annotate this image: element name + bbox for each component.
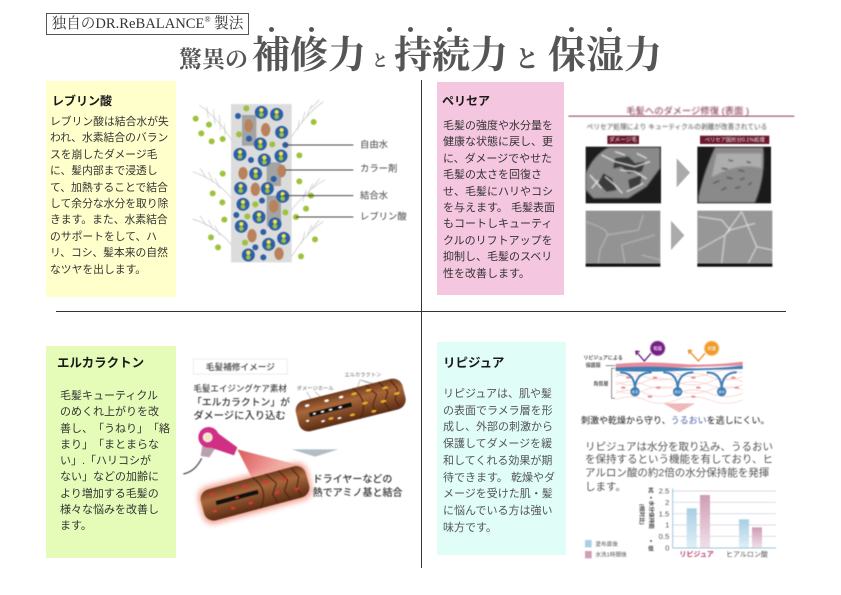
text: lipidure function: します。 bbox=[585, 481, 626, 493]
chart: skin protection diagram: 水分 bbox=[718, 389, 726, 394]
top hair bbox=[294, 376, 408, 434]
text: elkalactone description: より増加する毛髪の bbox=[60, 488, 159, 500]
title bbox=[179, 27, 662, 77]
text: lipidure function: リピジュアは水分を取り込み、うるおい bbox=[585, 441, 773, 453]
chart: moisture retention bar chart: 高 bbox=[648, 487, 654, 495]
chart: hair repair image bbox=[182, 358, 406, 528]
chart: hair repair image: 毛髪エイジングケア素材 bbox=[193, 383, 287, 393]
chart: skin protection diagram: 水分 bbox=[674, 389, 682, 394]
text: lipidure description bbox=[443, 388, 555, 534]
text: lipidure description: 成し、外部の刺激から bbox=[443, 421, 553, 433]
chart: skin protection diagram bbox=[580, 340, 769, 426]
chart: hair repair image: ダメージに入り込む bbox=[193, 409, 286, 422]
chart: skin protection diagram: 刺激や乾燥から守り、うるおいを逃しにくい。 bbox=[581, 415, 769, 426]
text: elkalactone description: い」.「ハリコシが bbox=[60, 455, 151, 467]
micrographs bbox=[586, 147, 772, 267]
chart: hair repair image: 熱でアミノ基と結合 bbox=[313, 486, 402, 499]
dryer bbox=[183, 427, 237, 474]
chart: hair repair image: エルカラクトン bbox=[344, 372, 381, 379]
chart: moisture retention bar chart: 1.5 bbox=[659, 509, 669, 518]
badge: DR.ReBALANCE method: 独自のDR.ReBALANCE® 製法 bbox=[52, 15, 243, 32]
text: levulinic acid description: て、加熱することで結合 bbox=[50, 182, 168, 194]
text: pericare description: せ、毛髪にハリやコシ bbox=[443, 186, 553, 198]
chart: moisture retention bar chart: 水洗1時間後 bbox=[595, 551, 627, 559]
chart: hair water diagram: 自由水 bbox=[360, 138, 389, 149]
text: lipidure description: に悩んでいる方は強い bbox=[443, 505, 552, 517]
title: 驚異の bbox=[179, 47, 248, 72]
text: lipidure function bbox=[585, 441, 773, 493]
text: levulinic acid description bbox=[50, 116, 169, 276]
chart: moisture retention bar chart: 水分保持能 bbox=[647, 501, 655, 529]
text: lipidure description: リピジュアは、肌や髪 bbox=[443, 388, 552, 400]
chart: hair damage repair micrographs bbox=[568, 105, 795, 268]
heading: levulinic acid: レブリン酸 bbox=[52, 94, 112, 108]
text: pericare description: クルのリフトアップを bbox=[443, 235, 553, 247]
text: elkalactone description: 様々な悩みを改善し bbox=[60, 504, 159, 516]
text: pericare description: 毛髪の強度や水分量を bbox=[443, 120, 553, 132]
chart: moisture retention bar chart: ▲ bbox=[649, 494, 653, 499]
title: 持続力 bbox=[394, 35, 508, 77]
text: elkalactone description: ます。 bbox=[60, 520, 92, 532]
text: pericare description: 抑制し、毛髪のスベリ bbox=[443, 251, 552, 263]
chart: moisture retention bar chart: 1 bbox=[665, 521, 669, 530]
text: levulinic acid description: のサポートをして、ハ bbox=[50, 231, 157, 243]
chart: moisture retention bar chart: 低 bbox=[648, 544, 654, 552]
chart: hair repair image: ドライヤーなどの bbox=[313, 473, 392, 485]
text: elkalactone description bbox=[60, 390, 170, 532]
text: pericare description: 健康な状態に戻し、更 bbox=[443, 136, 553, 148]
chart: moisture retention bar chart: 0.5 bbox=[659, 532, 669, 541]
text: lipidure description: 味方です。 bbox=[443, 522, 497, 534]
panel: polyquaternium bbox=[437, 82, 564, 295]
text: levulinic acid description: に、髪内部まで浸透し bbox=[50, 165, 158, 177]
chart: skin protection diagram: リピジュアによる bbox=[583, 355, 623, 362]
chart: skin protection diagram: 保護膜 bbox=[586, 362, 601, 369]
chart: skin protection diagram: 乾燥 bbox=[653, 345, 663, 352]
title: と bbox=[372, 53, 388, 70]
text: elkalactone description: ない」などの加齢に bbox=[60, 471, 159, 483]
title: 保湿力 bbox=[548, 35, 662, 77]
text: levulinic acid description: して余分な水分を取り除 bbox=[50, 198, 168, 210]
chart: moisture retention bar chart: 0 bbox=[665, 543, 669, 552]
text: levulinic acid description: きます。また、水素結合 bbox=[50, 214, 168, 226]
text: lipidure description: 和してくれる効果が期 bbox=[443, 455, 552, 467]
text: levulinic acid description: スを崩したダメージ毛 bbox=[50, 149, 157, 161]
chart: hair damage repair micrographs: 毛髪へのダメージ修復 (表面 ) bbox=[626, 105, 749, 116]
chart: hair repair image: 「エルカラクトン」が bbox=[192, 396, 290, 409]
chart: hair repair image: 毛髪補修イメージ bbox=[206, 361, 275, 372]
text: pericare description: 毛髪の太さを回復さ bbox=[443, 169, 542, 181]
text: lipidure function: アルロン酸の約2倍の水分保持能を発揮 bbox=[585, 466, 770, 479]
text: levulinic acid description: われ、水素結合のバラン bbox=[50, 132, 168, 144]
chart: hair water diagram: カラー剤 bbox=[360, 164, 397, 174]
chart: hair damage repair micrographs: ペリセア固形分0.1%処理 bbox=[705, 136, 765, 144]
chart: hair repair image: ダメージホール bbox=[297, 384, 334, 392]
text: levulinic acid description: リ、コシ、髪本来の自然 bbox=[50, 247, 168, 259]
text: lipidure description: 待できます。 乾燥やダ bbox=[443, 472, 555, 484]
text: elkalactone description: のめくれ上がりを改 bbox=[60, 406, 159, 418]
panel: levulinic acid bbox=[46, 81, 176, 297]
chart: skin protection diagram: 角質層 bbox=[593, 381, 608, 388]
text: elkalactone description: まり」「まとまらな bbox=[60, 439, 159, 451]
chart: moisture retention bar chart: ヒアルロン酸 bbox=[726, 549, 768, 558]
text: pericare description: を与えます。 毛髪表面 bbox=[443, 202, 555, 214]
chart: moisture retention bar chart: (相対比) bbox=[638, 504, 646, 525]
text: lipidure description: メージを受けた肌・髪 bbox=[443, 488, 553, 500]
title: と bbox=[515, 47, 539, 73]
chart: moisture retention bar chart: ▼ bbox=[649, 538, 653, 543]
text: elkalactone description: 毛髪キューティクル bbox=[60, 390, 158, 402]
chart: hair water diagram bbox=[192, 100, 407, 263]
chart: hair water diagram: レブリン酸 bbox=[360, 210, 407, 221]
chart: skin protection diagram: 刺激 bbox=[707, 345, 717, 352]
chart: moisture retention bar chart: 2 bbox=[665, 498, 669, 507]
text: pericare description: もコートしキューティ bbox=[443, 218, 552, 230]
chart: hair damage repair micrographs: ダメージ毛 bbox=[609, 136, 637, 144]
panel: lipidure bbox=[437, 342, 566, 555]
chart: moisture retention bar chart: 塗布直後 bbox=[595, 540, 618, 548]
text: levulinic acid description: なツヤを出します。 bbox=[50, 264, 146, 276]
heading: elkalactone: エルカラクトン bbox=[57, 356, 144, 370]
chart: hair damage repair micrographs: ペリセア処理により キューティクルの剥離が改善されている bbox=[587, 122, 767, 131]
lower hair bbox=[195, 460, 315, 527]
chart: hair water diagram: 結合水 bbox=[360, 189, 389, 200]
text: lipidure description: 保護してダメージを緩 bbox=[443, 438, 552, 450]
text: elkalactone description: 善し、「うねり」「絡 bbox=[60, 423, 170, 435]
text: levulinic acid description: レブリン酸は結合水が失 bbox=[50, 116, 169, 128]
text: lipidure function: を保持するという機能を有しており、ヒ bbox=[585, 453, 773, 466]
text: pericare description: 性を改善します。 bbox=[443, 268, 530, 280]
heading: lipidure: リピジュア bbox=[443, 356, 504, 370]
chart: moisture retention bar chart: 2.5 bbox=[659, 487, 669, 496]
chart: moisture retention bar chart: リピジュア bbox=[679, 550, 714, 558]
chart: skin protection diagram: 水分 bbox=[632, 389, 639, 394]
text: pericare description: に、ダメージでやせた bbox=[443, 153, 552, 165]
title: 補修力 bbox=[252, 35, 366, 77]
text: pericare description bbox=[443, 120, 555, 280]
text: lipidure description: の表面でラメラ層を形 bbox=[443, 405, 553, 417]
panel: elkalactone bbox=[46, 346, 176, 558]
chart: moisture retention bar chart bbox=[584, 440, 776, 559]
heading: pericare: ペリセア bbox=[442, 94, 490, 108]
